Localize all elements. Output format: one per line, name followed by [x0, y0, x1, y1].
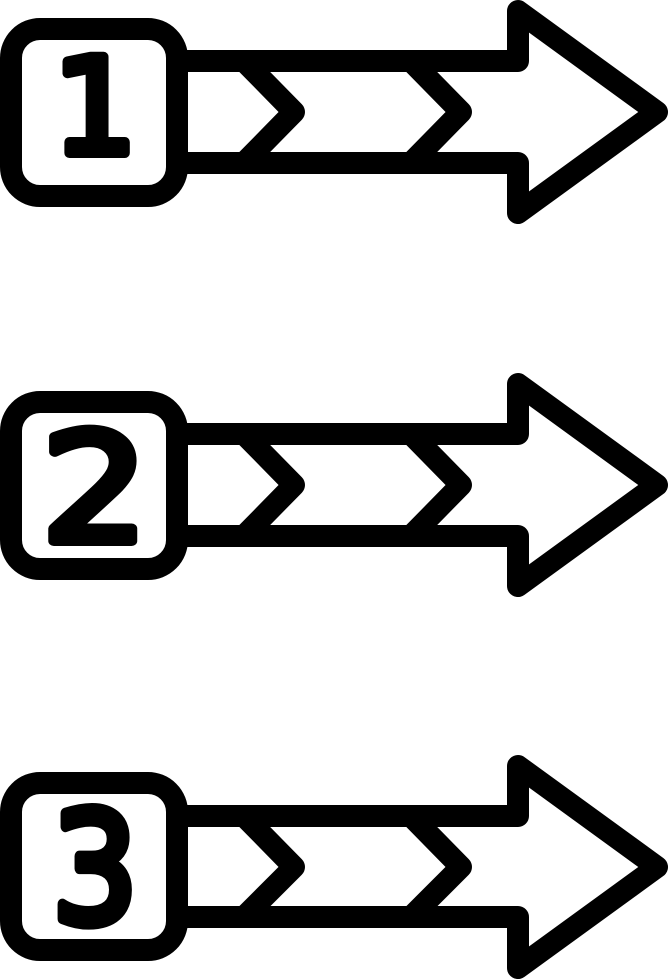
chevrons 2	[244, 434, 461, 536]
chevrons 1	[244, 61, 461, 163]
row 1: arrow labelled 1	[11, 11, 657, 213]
row 3: arrow labelled 3	[11, 766, 657, 968]
number box 2	[11, 402, 177, 569]
arrow outline 2	[170, 384, 657, 586]
number 3: 3	[52, 780, 138, 958]
arrow outline 1	[170, 11, 657, 213]
row 2: arrow labelled 2	[11, 384, 657, 586]
number 1: 1	[53, 31, 137, 185]
chevrons 3	[244, 816, 461, 917]
number box 1	[11, 29, 177, 196]
arrow outline 3	[170, 766, 657, 968]
number 2: 2	[42, 402, 148, 577]
number box 3	[11, 783, 177, 950]
